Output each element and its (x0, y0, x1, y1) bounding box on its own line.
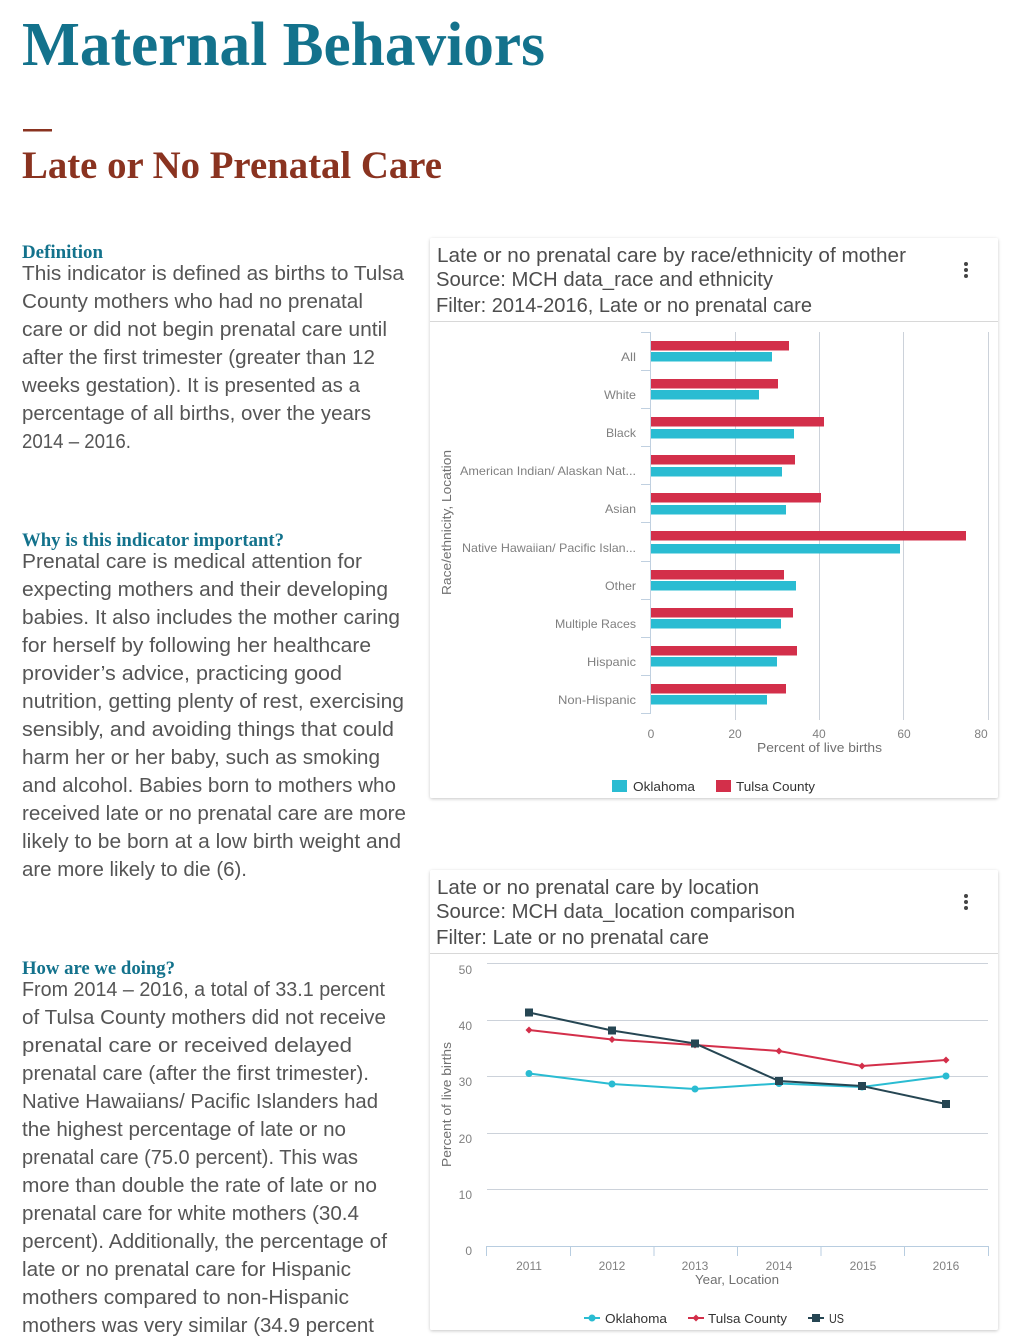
x axis values: 2011 (516, 1259, 542, 1273)
text block: why important: are more likely to die (6). (22, 858, 247, 881)
x axis values: 2013 (682, 1259, 709, 1273)
legend (584, 1311, 844, 1326)
x axis values (516, 1259, 960, 1273)
x axis values (648, 727, 988, 741)
text block: how are we doing: mothers was very similar (34.9 percent (22, 1314, 374, 1337)
text block: definition (21, 242, 405, 453)
text block: why important: sensibly, and avoiding things that could (22, 718, 394, 741)
text block: definition: care or did not begin prenatal care until (22, 318, 387, 341)
text block: definition: County mothers who had no prenatal (22, 290, 363, 313)
text block: definition: weeks gestation). It is presented as a (21, 374, 361, 397)
y axis title: Race/ethnicity, Location (439, 450, 454, 595)
text block: how are we doing: prenatal care (after the first trimester). (22, 1062, 369, 1085)
category labels: Native Hawaiian/ Pacific Islan... (462, 541, 636, 555)
x axis values: 20 (728, 727, 742, 741)
y axis values: 50 (459, 963, 472, 977)
text block: why important: harm her or her baby, such as smoking (22, 746, 380, 769)
chart title: Source: MCH data_location comparison (436, 900, 795, 923)
text block: how are we doing (22, 958, 387, 1337)
x axis values: 2016 (933, 1259, 960, 1273)
text block: why important: likely to be born at a low birth weight and (22, 830, 401, 853)
category labels: Hispanic (587, 655, 636, 669)
category labels: Multiple Races (555, 617, 636, 631)
category labels: All (621, 350, 636, 364)
legend: US (829, 1311, 844, 1326)
x axis values: 2014 (766, 1259, 793, 1273)
text block: why important (22, 530, 406, 881)
text block: why important: provider’s advice, practicing good (22, 662, 342, 685)
y axis values: 0 (465, 1244, 472, 1258)
icon: menu dots (964, 262, 968, 278)
x axis values: 60 (897, 727, 911, 741)
x axis values: 40 (812, 727, 826, 741)
x axis values: 0 (648, 727, 655, 741)
chart title (436, 876, 795, 949)
text block: how are we doing: more than double the rate of late or no (22, 1174, 377, 1197)
x axis title: Year, Location (695, 1272, 779, 1287)
text block: how are we doing: of Tulsa County mothers did not receive (22, 1006, 386, 1029)
chart title (436, 244, 906, 317)
bars (651, 341, 966, 704)
text block: why important: received late or no prenatal care are more (22, 802, 406, 825)
panel: line chart card (430, 870, 998, 1330)
text block: definition: 2014 – 2016. (22, 430, 131, 453)
subtitle: Late or No Prenatal Care (22, 144, 442, 187)
legend: Oklahoma (605, 1311, 668, 1326)
text block: how are we doing: How are we doing? (22, 958, 175, 979)
legend: Tulsa County (708, 1311, 788, 1326)
category labels (460, 350, 637, 707)
text block: how are we doing: prenatal care for white mothers (30.4 (22, 1202, 359, 1225)
legend (612, 779, 816, 794)
text block: why important: nutrition, getting plenty of rest, exercising (22, 690, 404, 713)
y axis values: 20 (459, 1132, 472, 1146)
chart title: Filter: 2014-2016, Late or no prenatal care (436, 294, 812, 317)
legend: Oklahoma (633, 779, 696, 794)
text block: definition: Definition (22, 242, 103, 263)
text block: definition: This indicator is defined as births to Tulsa (22, 262, 405, 285)
category labels: White (604, 388, 636, 402)
text block: why important: expecting mothers and their developing (22, 578, 388, 601)
x axis title: Percent of live births (757, 740, 883, 755)
y axis title: Percent of live births (439, 1041, 454, 1167)
text block: why important: Prenatal care is medical attention for (22, 550, 362, 573)
text block: why important: for herself by following her healthcare (22, 634, 371, 657)
icon: menu dots (964, 894, 968, 910)
text block: how are we doing: percent). Additionally, the percentage of (22, 1230, 387, 1253)
chart title: Filter: Late or no prenatal care (436, 926, 709, 949)
category labels: Other (605, 579, 636, 593)
text block: how are we doing: From 2014 – 2016, a total of 33.1 percent (22, 978, 385, 1001)
y axis values: 40 (459, 1019, 472, 1033)
text block: how are we doing: Native Hawaiians/ Pacific Islanders had (22, 1090, 378, 1113)
text block: why important: Why is this indicator important? (22, 530, 284, 551)
panel: bar chart card (430, 238, 998, 798)
series: Tulsa County (526, 1026, 950, 1070)
text block: how are we doing: the highest percentage of late or no (22, 1118, 346, 1141)
chart title: Late or no prenatal care by location (437, 876, 759, 899)
text block: definition: percentage of all births, over the years (22, 402, 371, 425)
series: US (525, 1008, 950, 1108)
x axis values: 80 (974, 727, 988, 741)
text block: how are we doing: prenatal care or received delayed (22, 1034, 352, 1057)
category labels: Asian (605, 502, 636, 516)
x axis values: 2012 (599, 1259, 626, 1273)
y axis values: 10 (459, 1188, 472, 1202)
legend: Tulsa County (736, 779, 816, 794)
accent dash (23, 129, 52, 132)
text block: how are we doing: prenatal care (75.0 percent). This was (22, 1146, 358, 1169)
chart title: Source: MCH data_race and ethnicity (436, 268, 774, 291)
series: Oklahoma (526, 1070, 950, 1092)
text block: how are we doing: mothers compared to non-Hispanic (22, 1286, 349, 1309)
text block: why important: babies. It also includes the mother caring (22, 606, 400, 629)
y axis values: 30 (459, 1075, 472, 1089)
category labels: American Indian/ Alaskan Nat... (460, 464, 636, 478)
x axis values: 2015 (850, 1259, 877, 1273)
y axis values (459, 963, 472, 1258)
text block: why important: and alcohol. Babies born to mothers who (22, 774, 396, 797)
category labels: Black (606, 426, 637, 440)
title: Maternal Behaviors (22, 11, 545, 79)
text block: how are we doing: late or no prenatal care for Hispanic (22, 1258, 351, 1281)
text block: definition: after the first trimester (greater than 12 (22, 346, 375, 369)
category labels: Non-Hispanic (558, 693, 636, 707)
chart title: Late or no prenatal care by race/ethnicity of mother (437, 244, 906, 267)
